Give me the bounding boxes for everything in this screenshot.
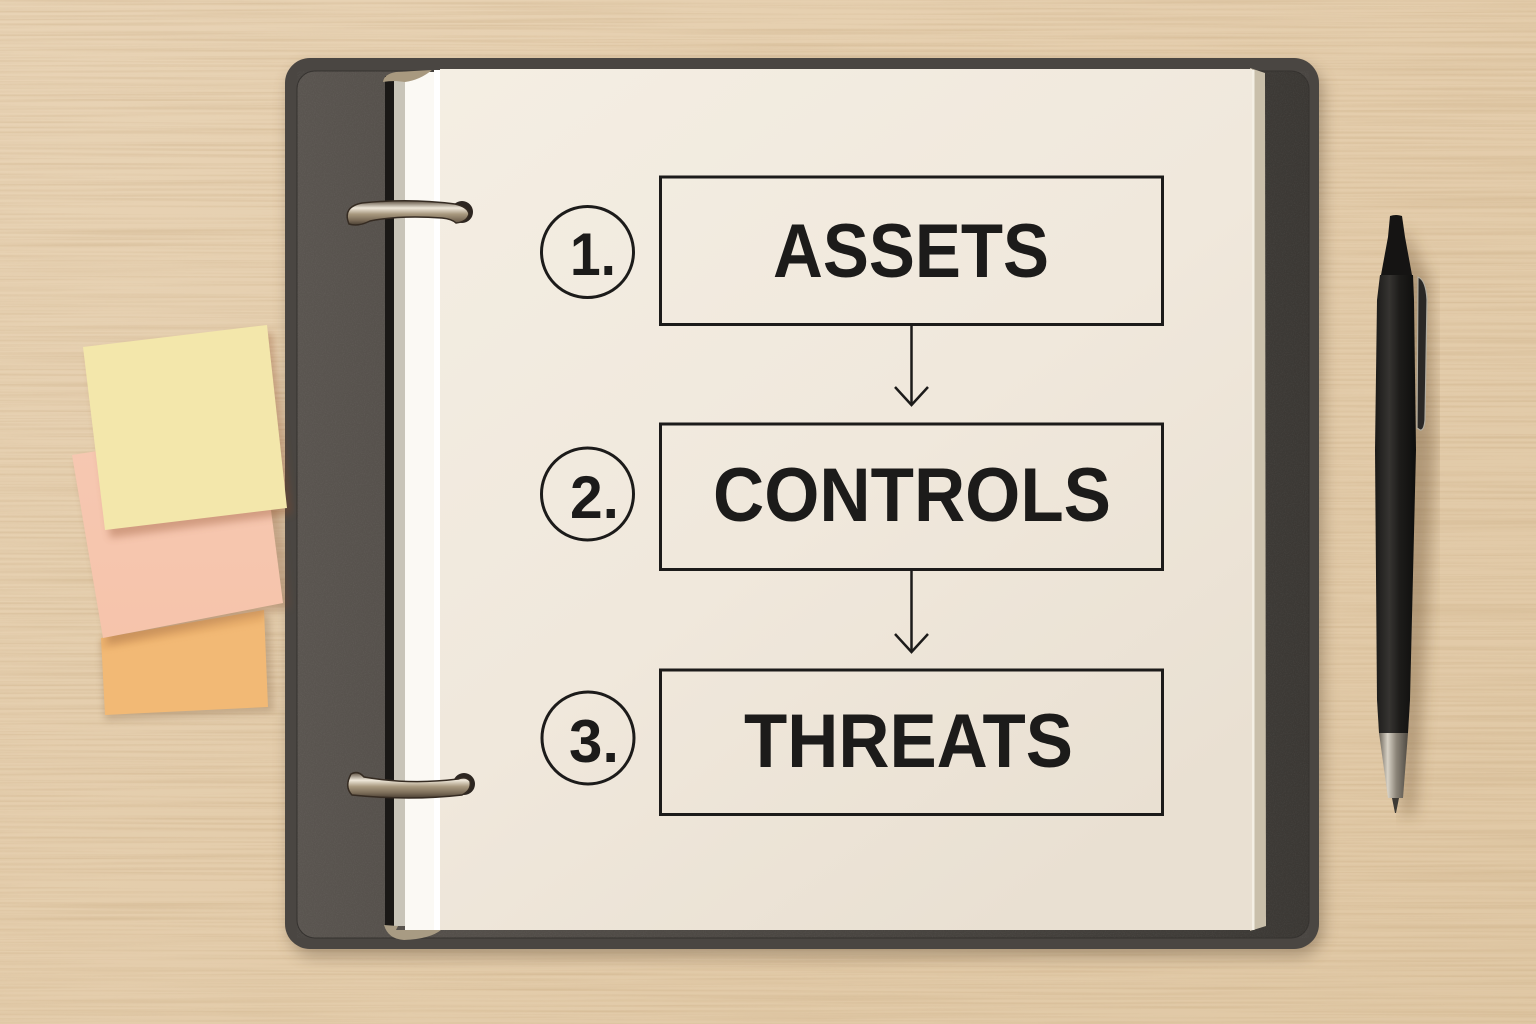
pen shadow	[1400, 230, 1436, 815]
number badge 3	[542, 692, 634, 784]
sticky notes	[72, 325, 292, 720]
flow diagram	[542, 177, 1162, 814]
ring bottom	[348, 773, 475, 798]
box: assets: ASSETS	[773, 209, 1049, 294]
number badge 1	[542, 206, 634, 298]
sticky note: pink	[72, 425, 290, 644]
pen tip cap	[1381, 215, 1412, 275]
number badge 2: 2.	[570, 464, 619, 531]
box: assets	[660, 177, 1162, 324]
number badge 2	[542, 448, 634, 540]
binder spine gap	[385, 76, 395, 928]
pen point	[1392, 798, 1399, 813]
page edges left	[394, 70, 441, 930]
ring top	[347, 201, 473, 225]
number badge 1: 1.	[570, 221, 616, 288]
pen	[1375, 215, 1436, 815]
step 1	[542, 177, 1162, 324]
step 2	[542, 424, 1162, 570]
binder cover	[285, 58, 1323, 956]
step 3	[542, 670, 1162, 814]
ring clip top	[383, 70, 432, 82]
arrow 2 to 3	[895, 570, 928, 652]
pen metal nose	[1379, 733, 1408, 798]
box: threats: THREATS	[744, 699, 1073, 784]
main page	[440, 69, 1252, 930]
pen body	[1375, 275, 1416, 733]
pen clip	[1417, 277, 1427, 430]
sticky note: orange	[101, 610, 274, 720]
arrow 1 to 2	[895, 325, 928, 405]
box: controls	[660, 424, 1162, 570]
box: threats	[660, 670, 1162, 814]
binder	[285, 58, 1323, 956]
page stack right	[1250, 68, 1266, 931]
box: controls: CONTROLS	[713, 453, 1111, 538]
number badge 3: 3.	[569, 708, 619, 775]
sticky note: yellow	[83, 325, 292, 538]
ring clip bottom	[384, 925, 441, 940]
